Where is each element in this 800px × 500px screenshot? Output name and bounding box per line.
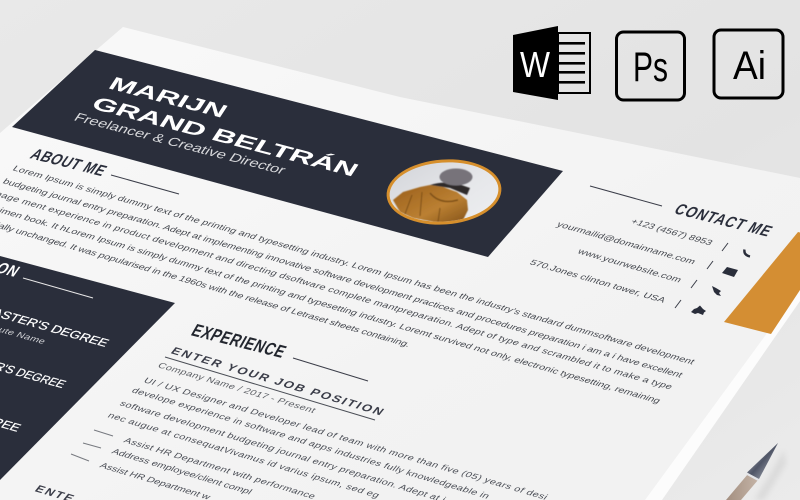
icon: Illustrator (714, 30, 783, 98)
job position title: ENTER YOUR JOB POSITION (168, 345, 388, 418)
job description: UI / UX Designer and Developer lead of team with more than five (05) years of desi (141, 376, 550, 500)
page edge thickness (644, 286, 800, 500)
bullet list: Address employee/client compl (109, 447, 254, 497)
pen shadow (754, 450, 786, 500)
job description: develope experience in software and apps industries fully knowledgeable in (129, 386, 492, 500)
profile photo (386, 159, 502, 225)
icon: Photoshop (616, 32, 684, 100)
panel background (0, 256, 175, 480)
website: www.yourwebsite.com (574, 247, 684, 285)
education panel (0, 244, 175, 480)
company line: Company Name / 2017 - Present (155, 361, 318, 415)
icon: Word (513, 26, 590, 100)
name line 2: GRAND BELTRÁN (87, 93, 363, 181)
experience section (32, 321, 550, 500)
word cover (513, 26, 558, 100)
pen tip (747, 443, 778, 479)
icon: cursor (712, 286, 721, 296)
orange accent block (724, 232, 800, 334)
job title: Freelancer & Creative Director (71, 111, 289, 177)
icon: mail (722, 267, 738, 277)
word letter: W (520, 44, 550, 85)
education rule (23, 278, 93, 298)
icon: Photoshop: Ps (633, 43, 668, 90)
about me rule (111, 175, 179, 194)
contact rule (590, 186, 662, 206)
pen barrel (726, 474, 758, 500)
band background (12, 50, 563, 257)
about me paragraph: budgeting journal entry preparation. Adept at implementing innovative software development practices and procedures preparation i am a i have excellent (0, 177, 685, 380)
pen collar (746, 472, 759, 481)
phone: +123 (4567) 8953 (628, 217, 715, 248)
name line 1: MARIJN (104, 74, 231, 122)
icon: Illustrator: Ai (733, 44, 766, 88)
experience heading: EXPERIENCE (188, 321, 290, 362)
contact separators (675, 243, 728, 308)
pen (726, 443, 786, 500)
contact section (527, 186, 776, 315)
bullet list: Assist HR Department with performance (121, 436, 318, 500)
bullet dashes (71, 430, 113, 461)
email: yourmailid@domainname.com (554, 220, 698, 266)
header band (12, 50, 563, 257)
address: 570.Jones clinton tower, USA (527, 258, 668, 305)
job title rule (165, 357, 375, 420)
icon: phone (744, 250, 750, 256)
word document lines (558, 33, 590, 93)
about me heading: ABOUT ME (26, 146, 110, 180)
icon: home (691, 306, 706, 315)
about me section (0, 146, 697, 406)
about me paragraph: Lorem Ipsum is simply dummy text of the printing and typesetting industry. Lorem Ipsum has been the industry's standard dummsoftware development (10, 164, 697, 367)
job description: nec augue at consequatVivamus id varius ipsum, sed eg (105, 411, 382, 500)
experience rule (293, 358, 368, 381)
